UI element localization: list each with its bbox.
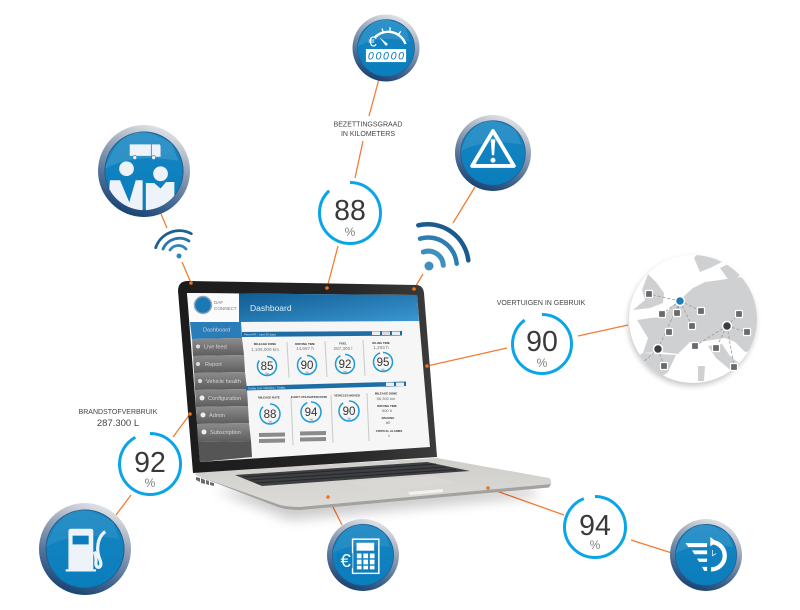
KPI 95: IDLING TIME [372, 341, 390, 345]
connector lines [116, 79, 672, 553]
gauge ring 90: % [537, 356, 548, 370]
KPI 90: DRIVING TIME [295, 342, 315, 346]
dashboard header [239, 294, 419, 322]
KPI 88 [258, 396, 285, 443]
lid connection dots [188, 281, 490, 499]
KPI 85: MILEAGE DONE [254, 342, 276, 346]
KPI 92: FUEL [339, 342, 347, 346]
land: continent [637, 277, 760, 354]
icon: people and truck [98, 125, 190, 217]
map hubs [654, 296, 732, 354]
detail list: 1 [388, 433, 391, 438]
icon: calculator with euro: € [341, 550, 352, 571]
gauge ring 90: 90 [526, 326, 558, 358]
label: voertuigen in gebruik: VOERTUIGEN IN GEBRUIK [497, 300, 586, 307]
sidebar menu: Subscription [210, 430, 241, 436]
laptop [178, 281, 551, 520]
map truck markers [646, 290, 750, 370]
KPI 90 vehicles: 90 [343, 406, 355, 418]
land: italy [708, 344, 739, 370]
laptop lid [178, 281, 437, 473]
screen content area [187, 293, 430, 462]
label: bezettingsgraad: BEZETTINGSGRAAD [334, 122, 402, 128]
map route lines [644, 294, 743, 363]
detail list: 56,300 km [377, 396, 396, 401]
sidebar menu: Vehicle health [206, 379, 241, 385]
laptop shadow [215, 488, 540, 520]
sidebar menu: Live feed [204, 344, 227, 350]
KPI 90: 14,667 h [296, 346, 314, 351]
KPI 85 [251, 342, 279, 376]
KPI 85: 85 [261, 361, 273, 373]
KPI 95: % [381, 367, 385, 372]
detail list: 500 h [382, 408, 392, 413]
trackpad [347, 476, 457, 492]
gauge ring 92: 92 [134, 447, 166, 479]
wifi signal left [156, 231, 191, 258]
sidebar menu: Configuration [208, 396, 241, 402]
land: scandinavia [694, 255, 740, 279]
gauge ring 88: 88 [334, 195, 366, 227]
logo panel: DAF [214, 300, 223, 305]
logo panel [187, 293, 239, 322]
detail list: IMAGING [382, 416, 395, 420]
label: brandstofverbruik: 287.300 L [97, 418, 139, 429]
KPI 90 vehicles: % [347, 416, 351, 421]
base front edge [195, 475, 551, 510]
label: brandstofverbruik [79, 409, 158, 429]
KPI 85: 1,105,000 km [251, 347, 279, 352]
panel dividers [287, 340, 369, 445]
laptop base [195, 458, 551, 507]
gauge ring 92 [120, 434, 180, 494]
KPI 94: % [309, 417, 313, 422]
ports [196, 477, 214, 486]
label: bezettingsgraad [334, 122, 402, 138]
rate bar: Today Live Vehicles - Today [248, 385, 285, 390]
KPI 88: MILEAGE RATE [258, 396, 280, 400]
icon: calculator with euro [327, 519, 399, 591]
detail list [375, 392, 402, 438]
land: britain [633, 274, 664, 310]
fleet KPI bar [242, 331, 402, 337]
gauge ring 94: % [590, 538, 601, 552]
KPI 90 vehicles [334, 394, 360, 421]
gauge ring 94 [564, 496, 626, 558]
land: iberia [640, 353, 676, 376]
KPI 92: 287,300 l [334, 346, 352, 351]
gauge ring 88: % [345, 225, 356, 239]
icon: gauge with euro [352, 14, 420, 81]
KPI 95 [372, 341, 392, 372]
gauge ring 92: % [145, 476, 156, 490]
base notch [408, 489, 443, 495]
detail list: MILEAGE DONE [375, 392, 397, 396]
map of Europe [628, 250, 760, 386]
rate bar [246, 382, 406, 390]
icon: fuel pump [39, 503, 131, 595]
KPI 88: % [268, 419, 272, 424]
detail list: CRITICAL ALARMS [376, 429, 402, 433]
KPI 92: % [343, 369, 347, 374]
sidebar menu: Admin [209, 413, 225, 419]
sidebar menu [190, 322, 252, 462]
gauge ring 94: 94 [579, 510, 611, 542]
gauge ring 88 [320, 182, 380, 244]
land: sardinia [698, 366, 705, 381]
KPI 92: 92 [339, 359, 351, 371]
KPI 90: 90 [301, 360, 313, 372]
fleet KPI bar: Fleet KPI - Last 30 days [244, 332, 277, 336]
KPI 92 [334, 342, 354, 374]
dashboard header: Dashboard [250, 303, 292, 313]
sidebar menu: Dashboard [203, 328, 230, 334]
detail list: DRIVING TIME [377, 404, 397, 408]
detail list: 80 [386, 420, 391, 425]
sidebar menu: Report [205, 362, 222, 368]
KPI 90 vehicles: VEHICLES MOVED [334, 394, 360, 398]
KPI 94 [291, 395, 327, 442]
logo panel: CONNECT [214, 306, 237, 311]
KPI 95: 95 [377, 357, 389, 369]
KPI 85: % [265, 371, 269, 376]
icon: gauge with euro: 00000 [368, 50, 404, 62]
KPI 90: % [305, 370, 309, 375]
label: brandstofverbruik: BRANDSTOFVERBRUIK [79, 409, 158, 416]
wifi signal right [418, 224, 468, 270]
keyboard [235, 462, 470, 486]
KPI 94: 94 [305, 407, 318, 419]
icon: declining bars with clock arrow [670, 519, 742, 591]
KPI 90 [295, 342, 316, 375]
icon: gauge with euro: € [368, 35, 377, 51]
KPI 95: 1,203 h [373, 345, 389, 350]
label: bezettingsgraad: IN KILOMETERS [341, 131, 395, 138]
icon: warning triangle [455, 115, 531, 191]
KPI 88: 88 [264, 409, 276, 421]
gauge ring 90 [512, 314, 572, 374]
KPI 94: FLEET UTILISATION RATE [291, 395, 327, 399]
